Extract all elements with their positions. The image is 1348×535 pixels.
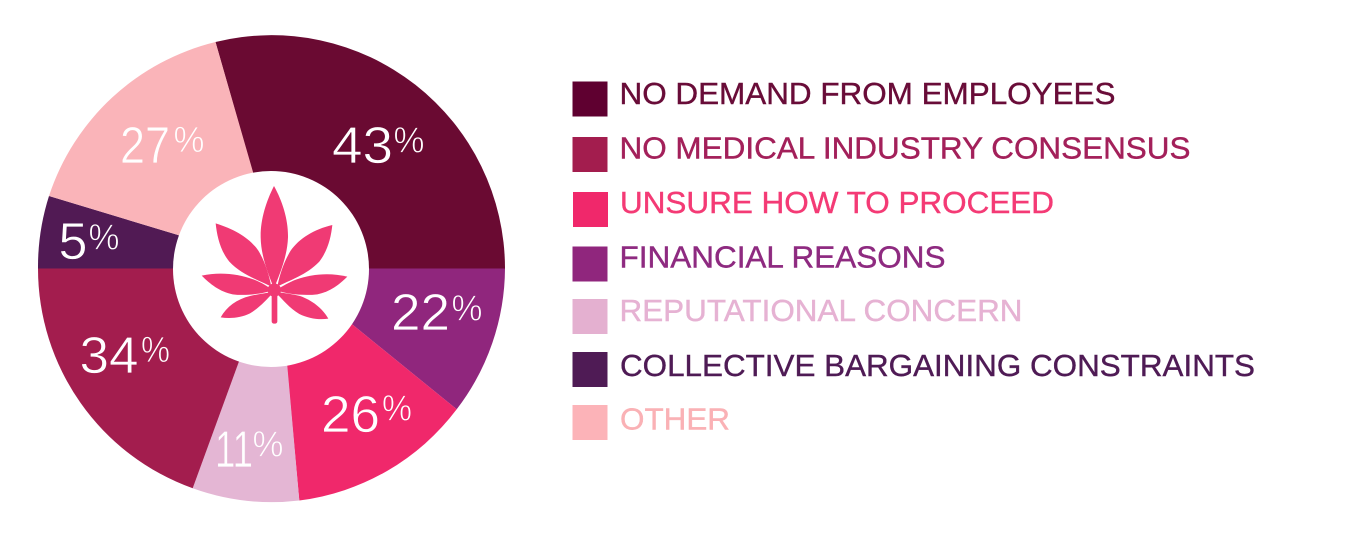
label 5%: % — [88, 216, 120, 258]
label 34% — [80, 327, 170, 385]
slice: financial reasons 22% — [271, 268, 505, 409]
icon: cannabis leaf — [202, 186, 347, 324]
legend item: no demand from employees: NO DEMAND FROM EMPLOYEES — [620, 77, 1116, 111]
label 27% — [120, 117, 204, 175]
slice: no demand from employees 43% — [216, 35, 505, 269]
label 11%: 11 — [215, 421, 253, 479]
label 11%: % — [252, 424, 284, 464]
center circle with leaf icon — [173, 171, 369, 367]
label 43% — [332, 117, 424, 175]
label 26%: % — [382, 388, 412, 428]
label 27%: % — [174, 119, 204, 160]
legend item: reputational concern: REPUTATIONAL CONCERN — [620, 294, 1022, 328]
legend item: collective bargaining constraints: COLLECTIVE BARGAINING CONSTRAINTS — [620, 349, 1255, 383]
legend item: no medical industry consensus: NO MEDICAL INDUSTRY CONSENSUS — [620, 132, 1190, 166]
label 22% — [391, 284, 482, 342]
label 22%: % — [452, 288, 482, 328]
legend — [572, 77, 1255, 440]
slice: other 27% — [49, 42, 271, 268]
slice: no medical industry consensus 34% — [38, 268, 271, 488]
pie chart — [38, 35, 505, 502]
label 34%: % — [141, 329, 170, 370]
label 5%: 5 — [58, 213, 88, 271]
legend item: financial reasons: FINANCIAL REASONS — [620, 240, 946, 274]
label 26%: 26 — [321, 386, 380, 444]
slice: unsure how to proceed 26% — [271, 268, 457, 500]
label 43%: % — [394, 120, 424, 160]
label 27%: 27 — [120, 117, 170, 175]
label 5% — [58, 213, 120, 271]
label 22%: 22 — [391, 284, 450, 342]
label 43%: 43 — [332, 117, 393, 175]
slice: reputational concern 11% — [193, 268, 299, 502]
legend item: other: OTHER — [620, 402, 730, 436]
label 26% — [321, 386, 412, 444]
label 34%: 34 — [80, 327, 138, 385]
legend item: unsure how to proceed: UNSURE HOW TO PROCEED — [620, 186, 1054, 220]
slice: collective bargaining constraints 5% — [38, 196, 271, 268]
legend item: other — [572, 402, 730, 440]
